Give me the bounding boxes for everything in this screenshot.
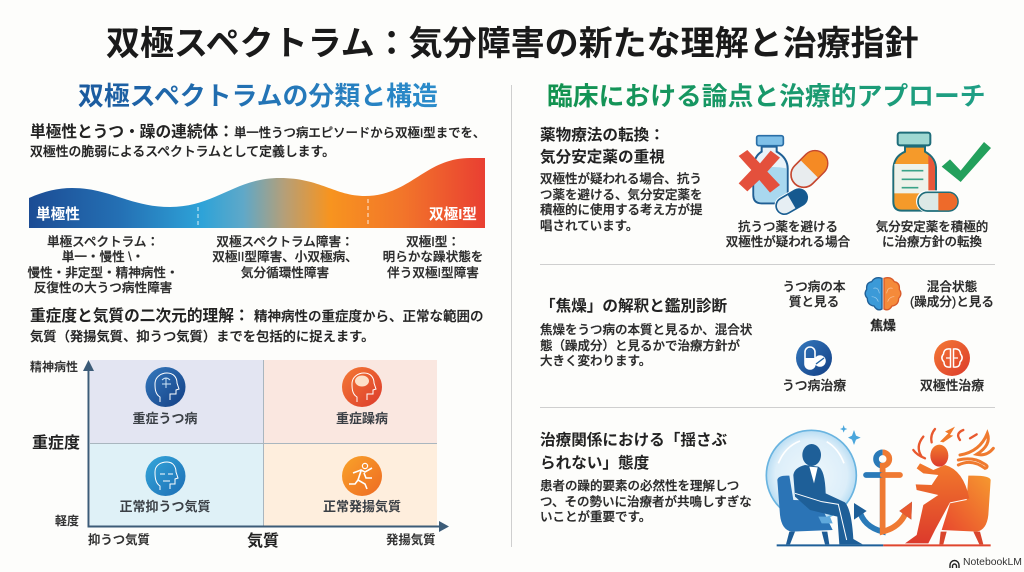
text block: two-dimensional understanding: 精神病性の重症度から、正常な範囲の	[254, 309, 484, 324]
spectrum label: bipolar spectrum: 双極II型障害、小双極病、	[212, 250, 358, 264]
section text: pharmacotherapy: 積極的に使用する考え方が提	[540, 203, 703, 217]
spectrum wave chart: 単極性	[36, 205, 80, 223]
anchor	[859, 452, 907, 532]
section text: pharmacotherapy: 唱されています。	[540, 219, 638, 233]
section text: unshaken attitude	[540, 479, 752, 524]
icon: severe mania	[342, 367, 382, 407]
section text: unshaken attitude: いことが重要です。	[540, 510, 651, 524]
quadrant label: severe depression: 重症うつ病	[132, 411, 198, 426]
section heading: pharmacotherapy: 気分安定薬の重視	[540, 149, 665, 166]
icon: bipolar treatment	[934, 340, 970, 376]
caption: use mood stabilizers: に治療方針の転換	[882, 235, 982, 249]
spectrum wave chart: 双極I型	[429, 206, 477, 223]
therapist chair	[777, 476, 833, 544]
flames	[913, 427, 993, 468]
section text: unshaken attitude: 患者の躁的要素の必然性を理解しつ	[540, 479, 739, 493]
text block: continuum: 双極性の脆弱によるスペクトラムとして定義します。	[30, 144, 335, 159]
caption: use mood stabilizers: 気分安定薬を積極的	[876, 220, 988, 234]
text block: continuum: 単一性うつ病エピソードから双極I型までを、	[234, 126, 485, 140]
axis label: depressive temperament: 抑うつ気質	[88, 533, 150, 547]
spectrum label: unipolar: 単極スペクトラム：	[47, 235, 159, 249]
bubble	[766, 430, 856, 520]
section heading: unshaken attitude: られない」態度	[540, 455, 649, 472]
section heading: unshaken attitude	[540, 432, 727, 472]
quadrant label: normal depressive: 正常抑うつ気質	[119, 499, 211, 514]
icon: mood stabilizer bottle with check	[892, 132, 991, 212]
text block: continuum: 単極性とうつ・躁の連続体：	[30, 124, 234, 141]
label: essence of depression: 質と見る	[789, 295, 839, 309]
patient chair	[939, 476, 991, 544]
icon: normal depressive temperament	[146, 456, 186, 496]
axis label: hyperthymic temperament: 発揚気質	[386, 533, 436, 547]
icon: normal hyperthymic temperament	[342, 456, 382, 496]
axis label: severity: 重症度	[32, 435, 80, 452]
floor	[777, 542, 883, 548]
spectrum label: unipolar: 単一・慢性 \・	[62, 250, 144, 264]
panel divider	[511, 85, 512, 547]
icon: two-tone brain	[864, 277, 902, 310]
section heading: pharmacotherapy	[540, 126, 665, 166]
label: mixed state: 混合状態	[927, 280, 977, 294]
caption: use mood stabilizers	[876, 220, 988, 249]
section heading: agitation: 「焦燥」の解釈と鑑別診断	[540, 298, 727, 315]
section text: pharmacotherapy: 双極性が疑われる場合、抗う	[540, 172, 702, 186]
section heading: unshaken attitude: 治療関係における「揺さぶ	[540, 432, 727, 449]
sparkles	[840, 425, 861, 445]
section text: agitation: 大きく変わります。	[540, 354, 651, 368]
label: mixed state: (躁成分)と見る	[910, 295, 994, 309]
label: depression treatment: うつ病治療	[782, 378, 846, 393]
text block: two-dimensional understanding: 気質（発揚気質、抑うつ気質）までを包括的に捉えます。	[30, 329, 374, 344]
section text: agitation: 態（躁成分）と見るかで治療方針が	[540, 339, 740, 353]
axis label: psychotic: 精神病性	[30, 360, 78, 374]
caption: avoid antidepressants: 双極性が疑われる場合	[726, 235, 850, 249]
icon: avoided antidepressant bottle	[738, 134, 828, 215]
spectrum label: bipolar I: 明らかな躁状態を	[383, 250, 483, 264]
axis label: temperament: 気質	[247, 533, 279, 550]
divider	[540, 264, 995, 265]
text block: two-dimensional understanding	[30, 307, 484, 344]
section text: pharmacotherapy: つ薬を避ける、気分安定薬を	[540, 188, 703, 202]
label: agitation: 焦燥	[870, 318, 896, 333]
label: essence of depression	[783, 280, 846, 309]
section text: agitation	[540, 322, 752, 368]
section text: unshaken attitude: つ、その勢いに治療者が共鳴しすぎな	[540, 495, 752, 509]
caption: avoid antidepressants	[726, 220, 850, 249]
spectrum label: unipolar: 慢性・非定型・精神病性・	[27, 266, 179, 280]
label: bipolar treatment: 双極性治療	[920, 378, 984, 393]
icon: depression treatment	[796, 340, 832, 376]
axis label: mild: 軽度	[55, 514, 79, 528]
spectrum label: bipolar spectrum: 気分循環性障害	[241, 266, 329, 280]
section text: agitation: 焦燥をうつ病の本質と見るか、混合状	[540, 323, 752, 337]
caption: avoid antidepressants: 抗うつ薬を避ける	[738, 220, 838, 234]
section text: pharmacotherapy	[540, 172, 703, 233]
heading: left panel: 双極スペクトラムの分類と構造	[78, 83, 438, 111]
section heading: pharmacotherapy: 薬物療法の転換：	[540, 127, 665, 144]
divider	[540, 407, 995, 408]
text block: two-dimensional understanding: 重症度と気質の二次元的理解：	[30, 308, 250, 325]
spectrum label: unipolar	[27, 235, 179, 295]
spectrum label: bipolar I: 伴う双極I型障害	[387, 266, 479, 280]
spectrum label: bipolar I	[383, 235, 483, 280]
heading: right panel: 臨床における論点と治療的アプローチ	[547, 83, 986, 111]
label: mixed state	[910, 280, 994, 309]
quadrant label: severe mania: 重症躁病	[336, 411, 388, 426]
label: essence of depression: うつ病の本	[783, 280, 845, 294]
therapist	[793, 444, 863, 544]
icon: severe depression	[146, 367, 186, 407]
title: 双極スペクトラム：気分障害の新たな理解と治療指針	[106, 25, 919, 63]
text block: continuum	[30, 123, 485, 159]
illustration: therapist, anchor and patient	[766, 425, 995, 546]
quadrant label: normal hyperthymic: 正常発揚気質	[323, 499, 401, 514]
spectrum label: bipolar I: 双極I型：	[406, 235, 460, 249]
NotebookLM watermark: NotebookLM	[963, 557, 1022, 568]
patient	[905, 445, 969, 543]
spectrum label: unipolar: 反復性の大うつ病性障害	[34, 281, 172, 295]
spectrum label: bipolar spectrum: 双極スペクトラム障害：	[216, 235, 354, 249]
spectrum label: bipolar spectrum	[212, 235, 358, 280]
